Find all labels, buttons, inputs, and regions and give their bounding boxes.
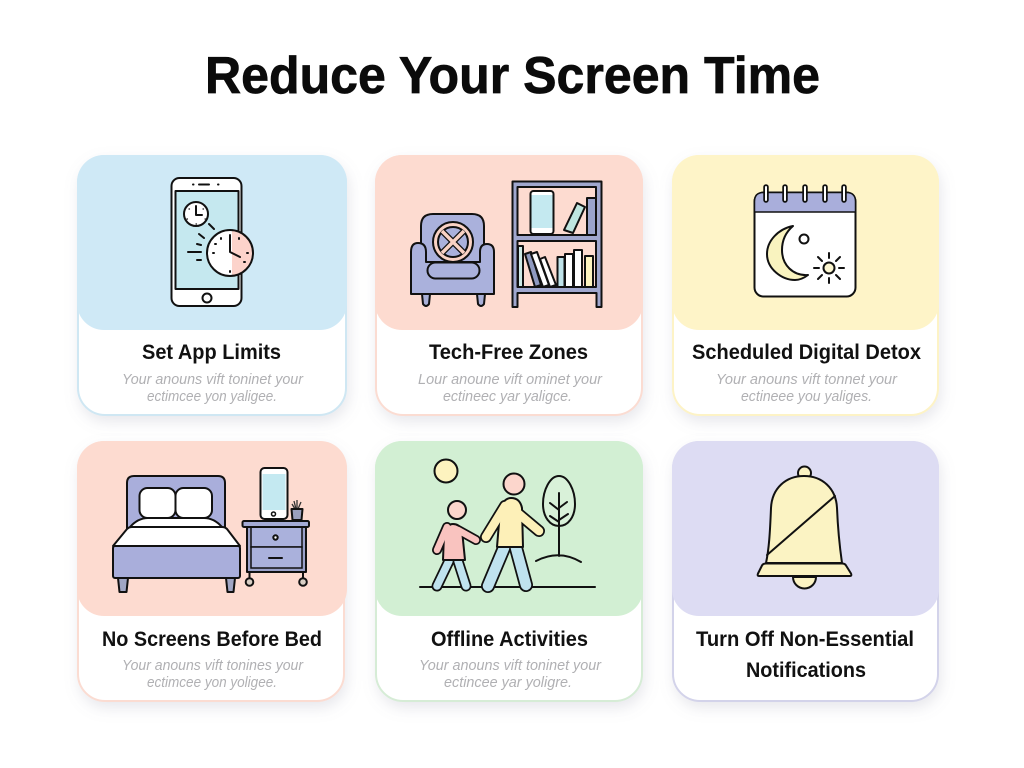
icon: family walking outdoors [420,460,595,587]
heading: Tech-Free Zones [429,341,588,364]
panel: set app limits [77,155,347,415]
heading: Turn Off Non-Essential [696,628,914,651]
heading: No Screens Before Bed [102,628,322,651]
description line 2: ectincee yar yoligre. [444,675,572,691]
title: Reduce Your Screen Time [205,47,820,105]
panel: no screens before bed [77,441,347,701]
heading: Set App Limits [142,341,281,364]
heading: Offline Activities [431,628,588,651]
icon: bed [113,476,240,592]
description line 2: ectineee you yaliges. [741,389,872,405]
heading line 2: Notifications [746,659,866,682]
icon: bookshelf [512,182,602,307]
description: Your anouns vift toninet your [419,658,602,674]
description: Your anouns vift tonnet your [716,372,898,388]
description: Lour anoune vift ominet your [418,372,603,388]
panel: scheduled digital detox [672,155,939,415]
panel: offline activities [375,441,643,701]
description line 2: ectineec yar yaligce. [443,389,572,405]
icon: phone with clocks [172,178,253,306]
icon: calendar with moon and sun [754,187,856,296]
icon: bell with slash [758,466,851,589]
description: Your anouns vift toninet your [122,372,304,388]
panel: tech-free zones [375,155,643,415]
heading: Scheduled Digital Detox [692,341,921,364]
description line 2: ectimcee yon yaligee. [147,389,277,405]
icon: armchair [411,214,494,306]
description line 2: ectimcee yon yoligee. [147,675,277,691]
description: Your anouns vift tonines your [122,658,304,674]
icon: nightstand with phone and plant [242,468,309,586]
panel: turn off notifications [672,441,939,701]
